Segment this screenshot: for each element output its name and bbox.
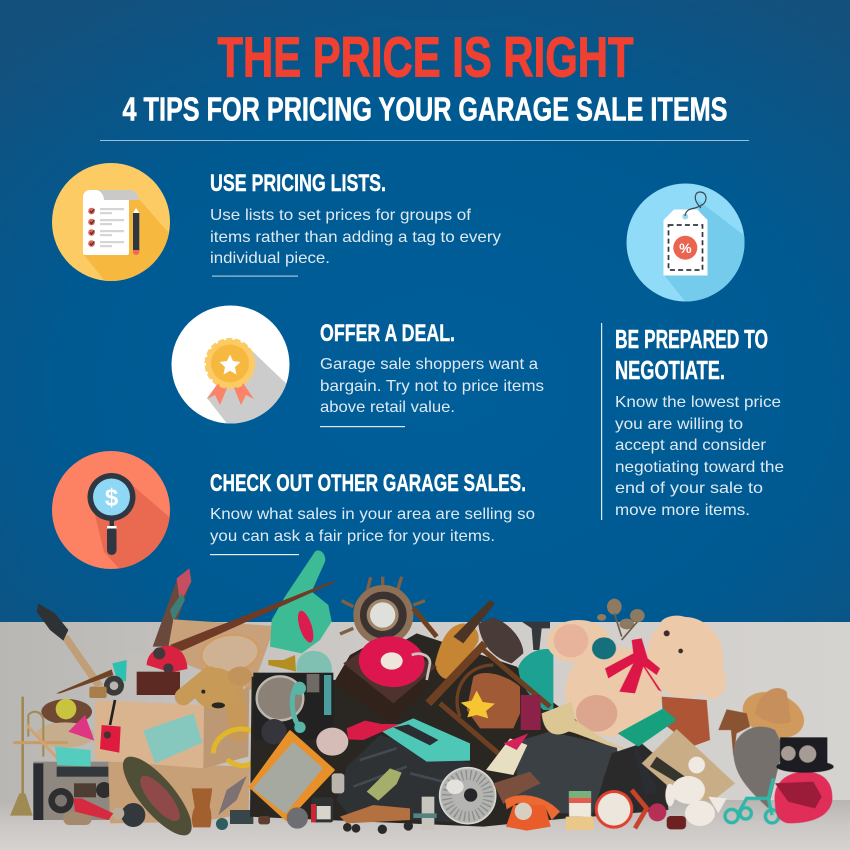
teal tricycle xyxy=(725,778,779,823)
blue background xyxy=(0,0,850,623)
large teddy bear xyxy=(547,608,733,737)
text: use pricing lists: individual piece. xyxy=(210,250,330,267)
turquoise sign xyxy=(143,713,202,763)
green hair dryer xyxy=(367,768,402,801)
text: use pricing lists: Use lists to set prices for groups of xyxy=(210,207,472,224)
top hat with goggles xyxy=(776,737,834,773)
lower cardboard box xyxy=(108,762,250,823)
red feather xyxy=(295,609,317,644)
concrete wall xyxy=(0,622,850,802)
icon: award ribbon xyxy=(172,306,295,430)
icon: price tag: % xyxy=(679,240,692,256)
piggy bank xyxy=(316,728,348,756)
pink record xyxy=(356,633,430,690)
upper cardboard box xyxy=(95,687,249,768)
heading: use pricing lists: USE PRICING LISTS. xyxy=(210,170,386,197)
small ball and box xyxy=(648,803,686,829)
stereo xyxy=(253,673,333,744)
heading: be prepared to negotiate: BE PREPARED TO xyxy=(615,326,768,354)
teal typewriter xyxy=(382,718,470,762)
wood carving xyxy=(192,788,212,827)
icon: magnifying glass xyxy=(52,451,175,575)
text: use pricing lists xyxy=(210,207,501,267)
teal disc xyxy=(592,637,616,659)
flip calendar xyxy=(566,791,594,830)
boots xyxy=(493,772,541,804)
foam finger xyxy=(270,550,332,653)
pink motorcycle helmet xyxy=(775,772,832,823)
desk fan xyxy=(440,768,496,824)
text: be prepared to negotiate: Know the lowest price xyxy=(615,394,781,411)
purple lantern xyxy=(521,695,541,730)
illustration: pile of garage sale items, left section xyxy=(10,568,275,845)
clock and small objects xyxy=(63,798,253,830)
text: be prepared to negotiate: you are willing to xyxy=(615,416,743,433)
guitar xyxy=(37,603,103,687)
text: check out other garage sales: Know what sales in your area are selling so xyxy=(210,506,535,523)
icon: pricing list xyxy=(52,163,170,281)
pink suitcase xyxy=(662,697,710,747)
table clock xyxy=(311,797,333,822)
gold trophy xyxy=(268,655,296,672)
wooden floor xyxy=(0,800,850,850)
plague mask xyxy=(542,702,629,751)
text: offer a deal: above retail value. xyxy=(320,399,455,416)
heading: be prepared to negotiate: NEGOTIATE. xyxy=(615,357,725,385)
text: be prepared to negotiate: accept and consider xyxy=(615,437,767,454)
text: offer a deal xyxy=(320,356,544,416)
tambourine xyxy=(213,729,259,766)
gold star xyxy=(461,691,495,718)
toy rocking horse xyxy=(718,709,750,757)
back box flap xyxy=(167,619,275,690)
teal telephone xyxy=(296,651,332,673)
green telephone xyxy=(618,708,677,795)
arrows xyxy=(153,568,191,647)
long wooden stick xyxy=(170,581,334,651)
red alarm clock xyxy=(595,790,647,829)
orange tv xyxy=(250,732,333,820)
chair frame xyxy=(413,608,550,753)
dark backing xyxy=(250,633,617,827)
roller skates xyxy=(340,805,413,834)
feather xyxy=(218,776,247,815)
text: offer a deal: Garage sale shoppers want a xyxy=(320,356,538,373)
heading: offer a deal: OFFER A DEAL. xyxy=(320,320,455,347)
pencil xyxy=(56,669,113,693)
cowboy hat xyxy=(736,684,810,746)
text: offer a deal: bargain. Try not to price items xyxy=(320,378,544,395)
red ribbon xyxy=(605,638,662,693)
snowman doll xyxy=(486,733,528,775)
orange rotary telephone xyxy=(505,795,560,831)
text: be prepared to negotiate xyxy=(615,394,784,519)
illustration: pile of garage sale items, centre section xyxy=(170,550,623,834)
illustration: dried flowers behind the pile xyxy=(597,599,645,640)
title: THE PRICE IS RIGHT xyxy=(218,26,634,90)
grey megaphone xyxy=(287,807,308,829)
baseball glove and ball xyxy=(36,699,94,748)
dark gap behind clock xyxy=(592,743,668,817)
ship wheel xyxy=(340,577,425,642)
boombox xyxy=(33,762,112,820)
black garbage bags xyxy=(337,732,623,823)
divider: negotiate column xyxy=(601,323,602,520)
trumpet xyxy=(10,697,68,816)
boxing gloves xyxy=(478,617,523,663)
iron stand xyxy=(522,622,550,650)
vintage radio xyxy=(642,729,735,802)
text: check out other garage sales: you can ask a fair price for your items. xyxy=(210,528,495,545)
silver gramophone horn xyxy=(733,727,783,808)
tribal mask xyxy=(112,747,202,845)
leather bags xyxy=(467,673,520,728)
teal gramophone horn xyxy=(518,649,553,710)
heading: check out other garage sales: CHECK OUT OTHER GARAGE SALES. xyxy=(210,470,526,497)
tennis racket xyxy=(199,631,261,675)
text: be prepared to negotiate: end of your sale to xyxy=(615,480,763,497)
icon: magnifying glass: $ xyxy=(105,484,119,512)
white plush rabbit xyxy=(665,757,727,826)
teddy bear xyxy=(183,667,252,732)
text: check out other garage sales xyxy=(210,506,535,545)
heading: be prepared to negotiate xyxy=(615,326,768,385)
small cylinder xyxy=(258,816,270,824)
text: be prepared to negotiate: move more items. xyxy=(615,502,750,519)
text: use pricing lists: items rather than adding a tag to every xyxy=(210,229,501,246)
hanging camera xyxy=(100,700,121,753)
microphone xyxy=(332,773,344,793)
text: be prepared to negotiate: negotiating toward the xyxy=(615,459,784,476)
robot toy xyxy=(413,797,437,830)
red helmet and radio xyxy=(89,646,187,698)
icon: price tag xyxy=(626,184,744,302)
small teal toy box xyxy=(55,747,91,767)
violin xyxy=(435,600,495,679)
illustration: pile of garage sale items, right section xyxy=(542,608,834,830)
red tool xyxy=(347,721,400,740)
gramophone base xyxy=(333,637,437,723)
